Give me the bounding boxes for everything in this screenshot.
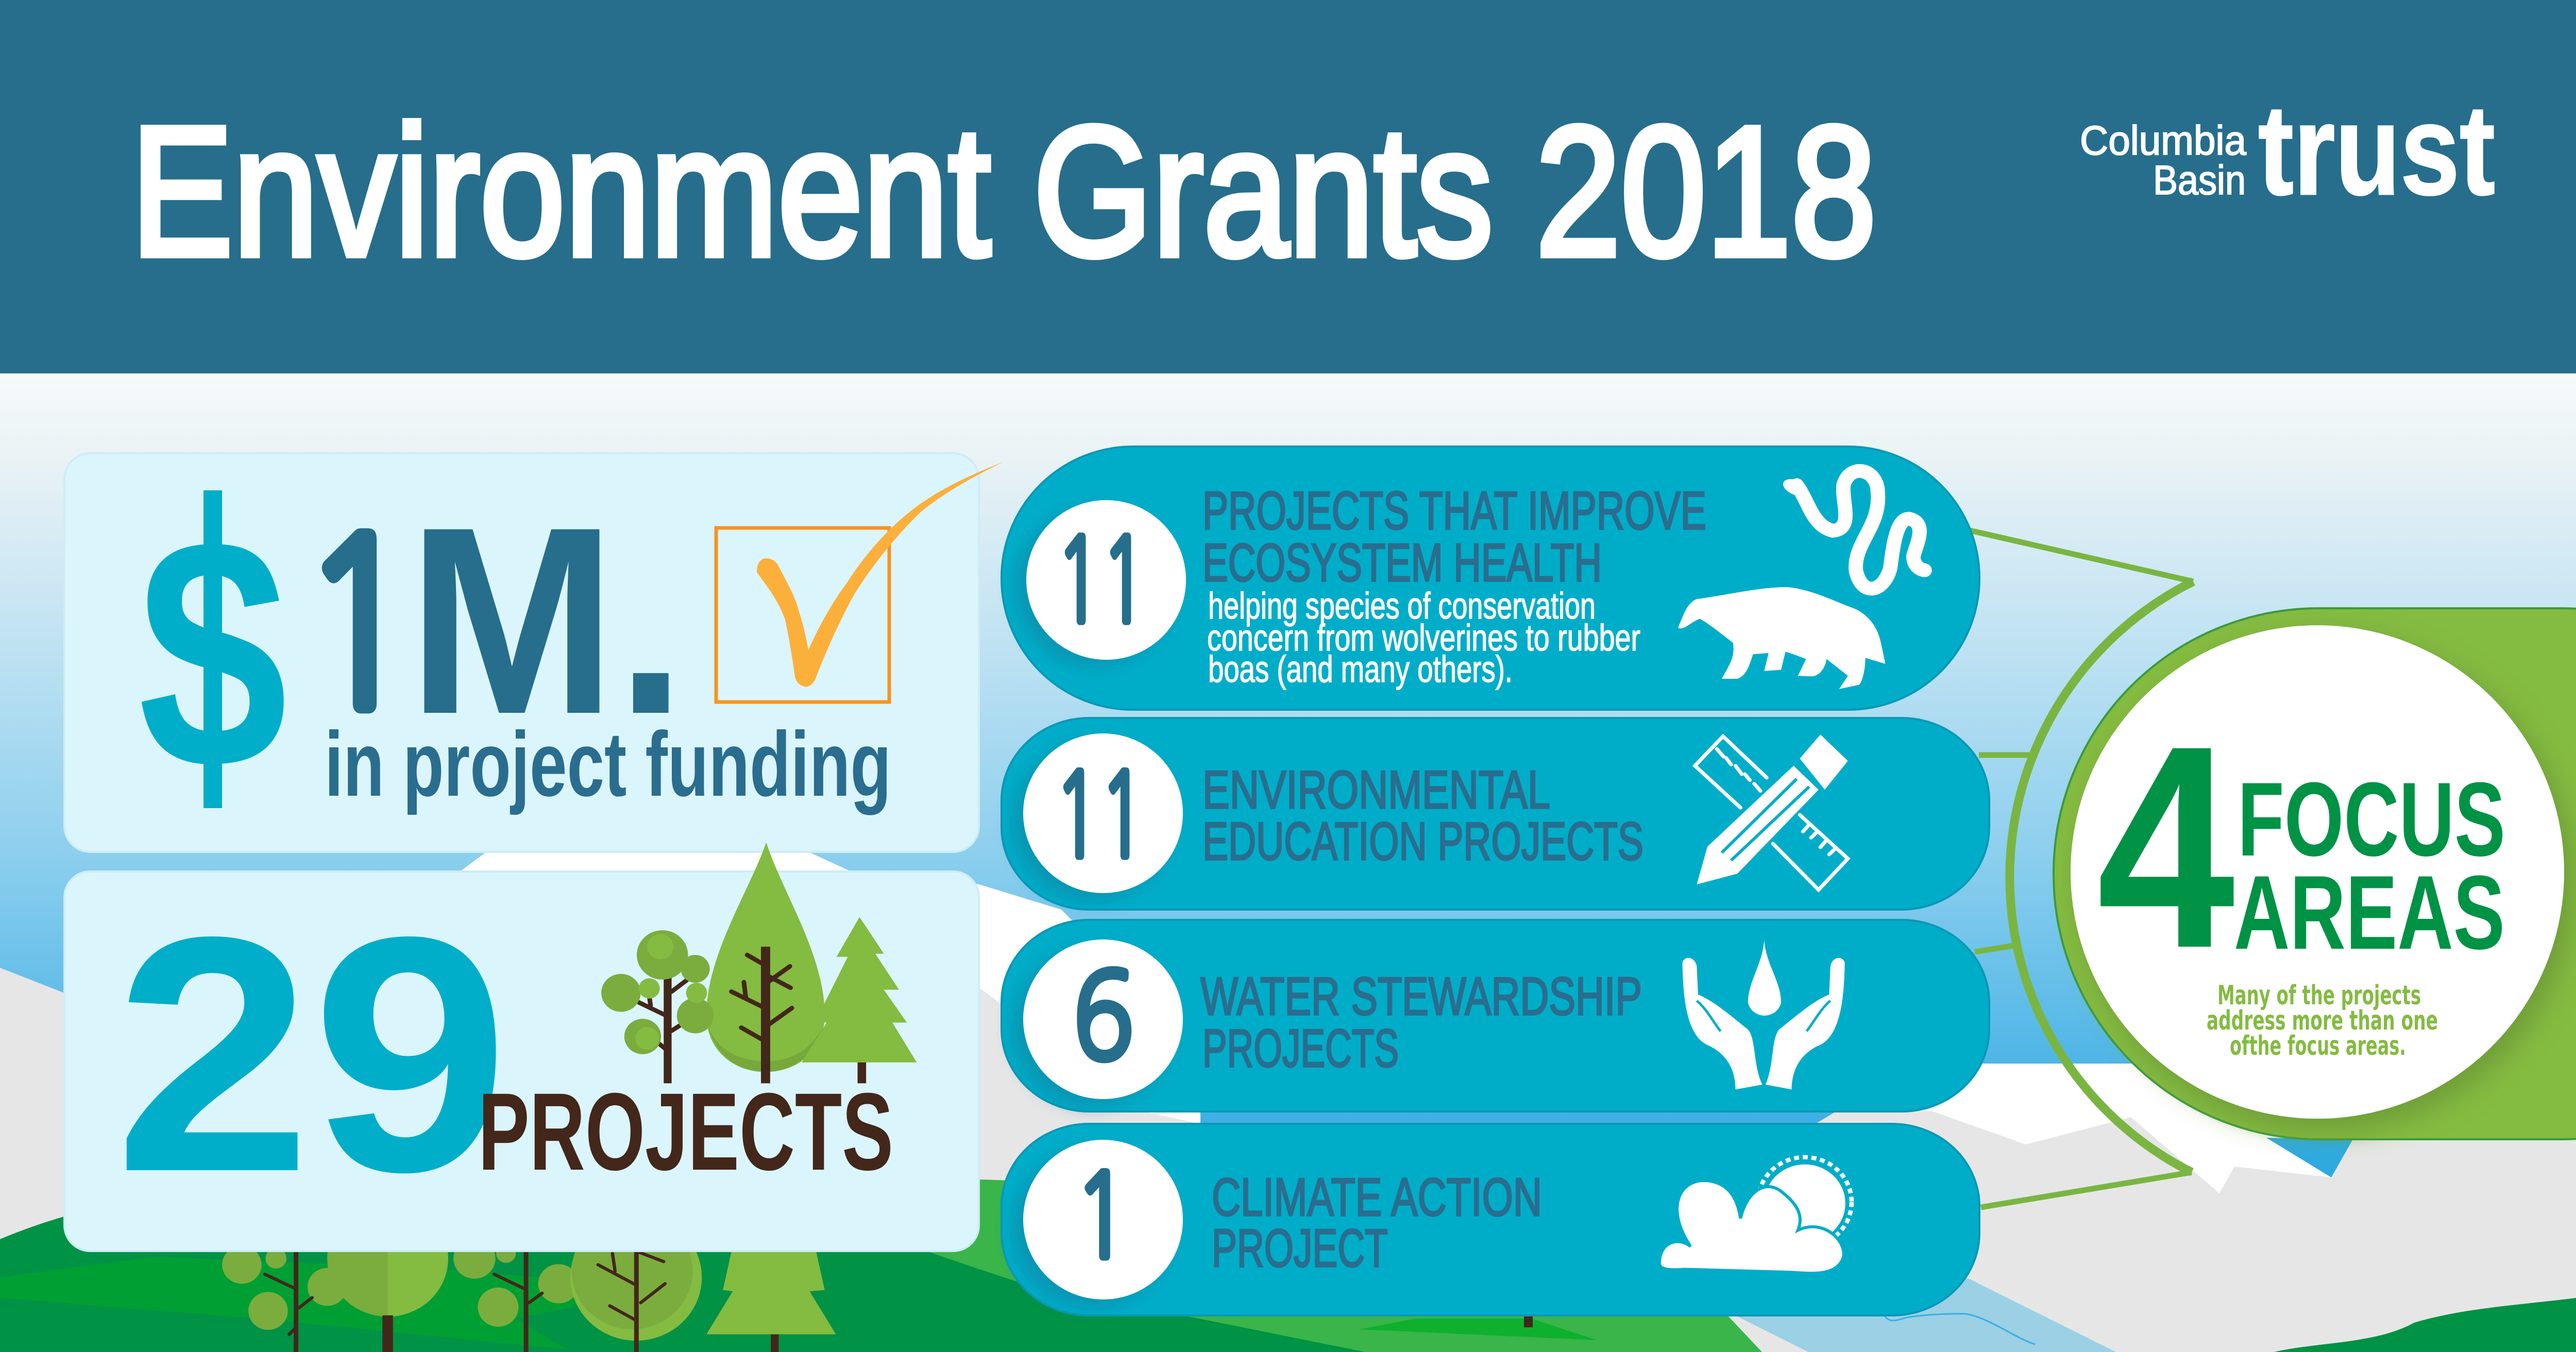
number: 11 bbox=[1055, 758, 1145, 874]
white disc bbox=[2071, 625, 2564, 1119]
description bbox=[1207, 586, 1640, 690]
dollar sign: $ bbox=[138, 469, 287, 837]
number badge bbox=[1026, 500, 1186, 660]
funding caption: in project funding bbox=[325, 713, 891, 815]
heading bbox=[1202, 481, 1706, 593]
heading: CLIMATE ACTION bbox=[1212, 1168, 1542, 1227]
header band bbox=[0, 0, 2576, 373]
number: 11 bbox=[1056, 523, 1147, 639]
1M amount: M. bbox=[408, 471, 686, 769]
checkbox bbox=[716, 528, 889, 702]
count 29: 29 bbox=[114, 867, 509, 1241]
number badge bbox=[1023, 1140, 1183, 1299]
pill: climate action bbox=[1002, 1124, 1979, 1315]
heading bbox=[1212, 1168, 1542, 1278]
pill: ecosystem health bbox=[1002, 447, 1979, 710]
logo: Columbia Basin Trust bbox=[2080, 78, 2495, 221]
digit 4: 4 bbox=[2097, 686, 2236, 1008]
description: boas (and many others). bbox=[1208, 649, 1513, 690]
1M amount bbox=[299, 471, 686, 769]
pill: environmental education bbox=[1002, 718, 1989, 910]
number badge bbox=[1023, 939, 1183, 1099]
number badge bbox=[1023, 733, 1183, 893]
heading: WATER STEWARDSHIP bbox=[1200, 967, 1642, 1026]
description: helping species of conservation bbox=[1208, 586, 1596, 627]
heading: PROJECTS THAT IMPROVE bbox=[1202, 481, 1706, 541]
description: concern from wolverines to rubber bbox=[1207, 618, 1640, 659]
number: 1 bbox=[1074, 1158, 1129, 1274]
heading: ECOSYSTEM HEALTH bbox=[1202, 533, 1602, 593]
panel: funding bbox=[64, 453, 1004, 852]
logo: Columbia Basin Trust: Basin bbox=[2153, 157, 2246, 203]
focus note bbox=[2207, 980, 2438, 1062]
number: 6 bbox=[1073, 957, 1134, 1076]
icon: cloud and sun bbox=[1659, 1157, 1852, 1273]
title: Environment Grants 2018 bbox=[131, 88, 1876, 294]
1M amount: 1 bbox=[299, 508, 418, 740]
focus note: Many of the projects bbox=[2217, 980, 2421, 1011]
pill: water stewardship bbox=[1002, 920, 1989, 1111]
icon: pencil and ruler bbox=[1695, 734, 1848, 890]
connector lines and arc bbox=[1970, 530, 2193, 1207]
heading bbox=[1202, 760, 1643, 871]
heading: ENVIRONMENTAL bbox=[1202, 760, 1550, 820]
projects word: PROJECTS bbox=[478, 1070, 893, 1193]
icon: snake and wolverine bbox=[1678, 471, 1925, 689]
focus note: address more than one bbox=[2207, 1005, 2438, 1036]
check mark bbox=[757, 461, 1004, 687]
panel: projects bbox=[64, 843, 979, 1251]
focus note: ofthe focus areas. bbox=[2230, 1031, 2406, 1062]
trees behind lower panel bbox=[222, 1200, 836, 1352]
heading: EDUCATION PROJECTS bbox=[1202, 812, 1643, 871]
landscape background bbox=[0, 373, 2576, 1352]
icon: hands holding water drop bbox=[1683, 939, 1845, 1089]
icon: trees bbox=[601, 843, 917, 1083]
heading: PROJECT bbox=[1212, 1219, 1388, 1278]
panel: four focus areas bbox=[2054, 608, 2576, 1139]
heading: PROJECTS bbox=[1202, 1019, 1399, 1079]
heading bbox=[1200, 967, 1642, 1079]
logo: Columbia Basin Trust: Columbia bbox=[2080, 117, 2246, 163]
logo: Columbia Basin Trust: trust bbox=[2258, 78, 2495, 221]
